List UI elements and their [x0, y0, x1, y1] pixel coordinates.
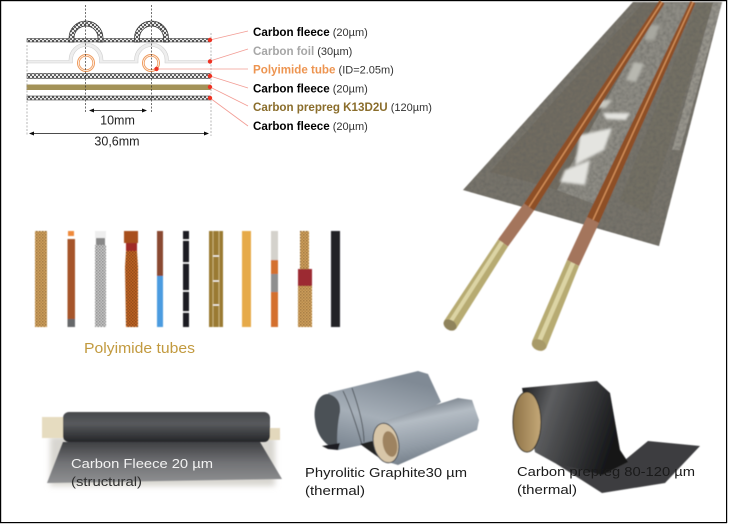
dimension: 30,6mm: [29, 132, 209, 148]
label: carbon fleece 2: Carbon fleece (20µm): [253, 82, 368, 96]
tube 1: [441, 0, 664, 333]
tube sample 10: [298, 231, 312, 327]
leader lines: [156, 31, 248, 126]
caption: carbon fleece: [71, 456, 213, 489]
core left: [42, 417, 66, 438]
small roll: [370, 398, 479, 465]
cross-section diagram: [26, 5, 248, 148]
large roll: [315, 371, 441, 462]
label: carbon prepreg: Carbon prepreg K13D2U (120µm): [253, 101, 432, 114]
photo: stave with two tubes: [441, 0, 722, 353]
caption: carbon prepreg: (thermal): [517, 482, 577, 497]
dimension: 10mm: 10mm: [100, 114, 135, 128]
layer labels: [253, 26, 432, 133]
photo: carbon prepreg roll: [513, 381, 700, 493]
shiny highlights: [560, 25, 660, 185]
tube sample 5: [157, 231, 163, 327]
roll: [63, 412, 270, 442]
photo: carbon fleece roll: [42, 412, 282, 486]
soft shadow: [50, 436, 275, 486]
caption: pyrolytic graphite: (thermal): [305, 483, 365, 498]
tube sample 11: [331, 231, 340, 327]
layer: top carbon fleece: [27, 21, 210, 42]
tube sample 9: [271, 231, 278, 327]
label: carbon foil: Carbon foil (30µm): [253, 45, 352, 58]
lower sheet: [535, 441, 700, 493]
label: carbon fleece 1: Carbon fleece (20µm): [253, 26, 368, 39]
tube sample 3: [95, 231, 106, 327]
core right: [266, 428, 280, 440]
heading: polyimide tubes: Polyimide tubes: [84, 341, 195, 357]
tube sample 8: [242, 231, 251, 327]
tube 2: [530, 1, 696, 353]
label: polyimide tube: Polyimide tube (ID=2.05m): [253, 64, 394, 76]
leader dots: [154, 38, 212, 100]
tube sample 6: [183, 231, 189, 327]
layer: carbon prepreg: [26, 84, 210, 90]
tube sample 2: [68, 231, 75, 327]
dimension: 30,6mm: 30,6mm: [94, 134, 140, 148]
caption: pyrolytic graphite: Phyrolitic Graphite30 µm: [305, 465, 467, 480]
tube sample 7: [209, 231, 223, 327]
centre lines and extents: [27, 5, 211, 136]
caption: carbon fleece: Carbon Fleece 20 µm: [71, 456, 213, 471]
polyimide tube samples: [35, 231, 340, 327]
stave sheet: [463, 2, 722, 246]
layer: carbon foil: [27, 43, 210, 63]
caption: carbon fleece: (structural): [71, 474, 142, 489]
dimension: 10mm: [89, 108, 147, 128]
tube sample 1: [35, 231, 47, 327]
label: carbon fleece 3: Carbon fleece (20µm): [253, 120, 368, 133]
layer: bottom carbon fleece: [27, 96, 210, 100]
layer: middle carbon fleece: [27, 74, 210, 78]
roll body: [522, 381, 628, 475]
caption: pyrolytic graphite: [305, 465, 467, 498]
tube sample 4: [124, 231, 138, 327]
photo: graphite rolls: [315, 371, 479, 465]
caption: carbon prepreg: [517, 464, 695, 497]
core opening: [513, 392, 541, 452]
layer: polyimide tubes: [78, 54, 160, 72]
sheet: [47, 442, 282, 483]
caption: carbon prepreg: Carbon prepreg 80-120 µm: [517, 464, 695, 479]
